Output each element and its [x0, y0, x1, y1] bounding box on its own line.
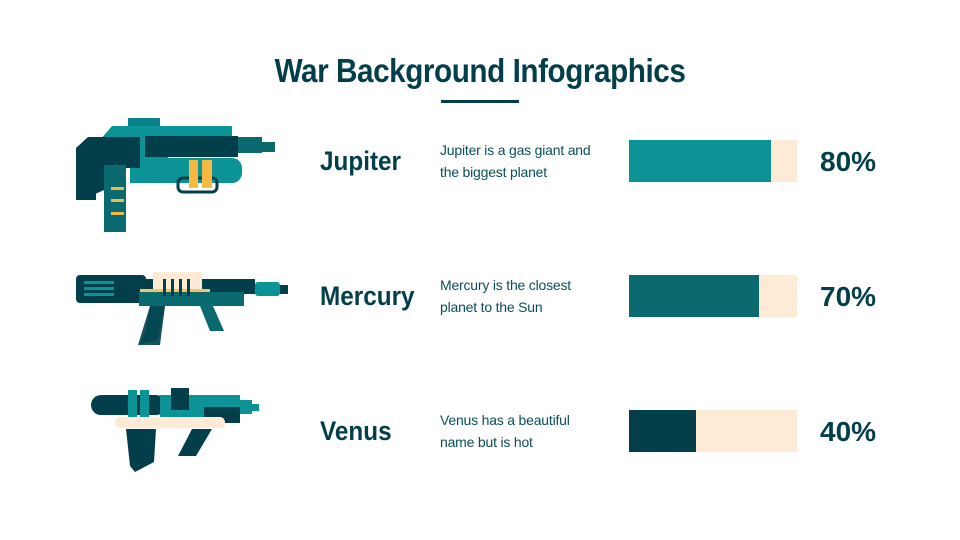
percent: 80%: [820, 146, 876, 177]
description: [440, 142, 590, 180]
percent: 70%: [820, 281, 876, 312]
description: Jupiter is a gas giant and: [440, 142, 590, 158]
icon: gun 1: [76, 118, 275, 232]
icon: guns: [76, 118, 288, 472]
description: planet to the Sun: [440, 299, 542, 315]
bar: [629, 140, 797, 182]
label: Mercury: [320, 281, 415, 311]
label: Jupiter: [320, 146, 401, 176]
description: [440, 277, 572, 315]
description: Venus has a beautiful: [440, 412, 570, 428]
description: the biggest planet: [440, 164, 547, 180]
percent: 40%: [820, 416, 876, 447]
icon: gun 2: [76, 272, 288, 345]
label: Venus: [320, 416, 392, 446]
description: Mercury is the closest: [440, 277, 571, 293]
title underline: [441, 100, 519, 103]
row: Mercury: [320, 275, 876, 317]
title: War Background Infographics: [275, 52, 685, 89]
description: [440, 412, 570, 450]
icon: gun 3: [91, 388, 259, 472]
row: Venus: [320, 410, 876, 452]
bar: [629, 410, 797, 452]
bar: [629, 275, 797, 317]
row: Jupiter: [320, 140, 876, 182]
description: name but is hot: [440, 434, 533, 450]
